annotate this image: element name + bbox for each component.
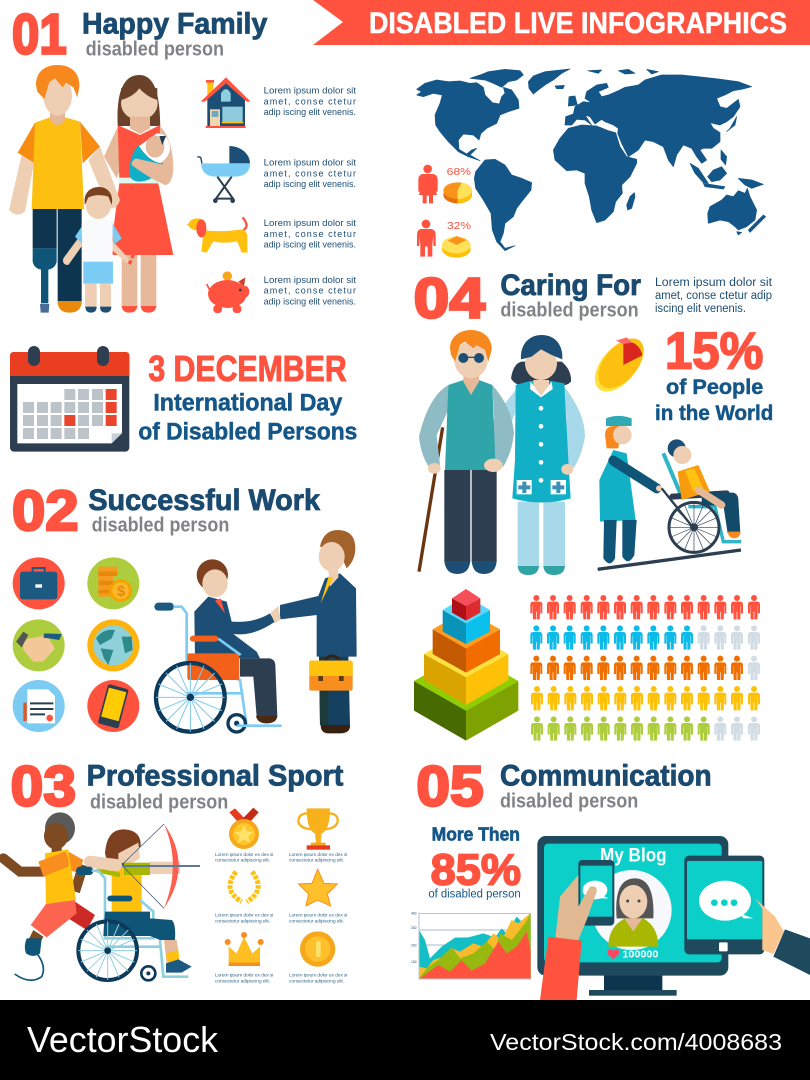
icon: baby pram xyxy=(197,146,250,203)
icon: laurel wreath xyxy=(230,872,258,902)
icon: handshake xyxy=(13,619,65,671)
text block: 3 december xyxy=(138,348,357,446)
area chart: 400 xyxy=(411,911,417,915)
panel: 3 december and 02 successful work xyxy=(10,346,357,733)
text block: sport captions: consectetur adipiscing elit. xyxy=(289,918,344,924)
text block: family list: amet, conse ctetur xyxy=(264,168,356,178)
text block: sport captions: consectetur adipiscing elit. xyxy=(215,918,270,924)
row: red 14 of 14 xyxy=(530,595,760,619)
stat: more then 85 percent xyxy=(428,824,521,901)
heading: 05 communication xyxy=(416,756,712,819)
text block: family list: adip iscing elit venenis. xyxy=(264,240,356,250)
text block: sport captions: consectetur adipiscing elit. xyxy=(215,978,270,984)
header ribbon xyxy=(313,0,810,45)
row: yellow 14 of 14 xyxy=(531,686,760,710)
figure: child with candy cane xyxy=(63,187,145,313)
text block: 3 december: International Day xyxy=(153,390,343,417)
3d stacked pyramid xyxy=(414,589,518,741)
stat: more then 85 percent: of disabled person xyxy=(428,887,521,901)
stat: more then 85 percent: More Then xyxy=(432,824,520,845)
stat: 68% women: 68% xyxy=(447,167,471,178)
text block: sport captions: Lorem ipsum dolor ex dex si xyxy=(289,973,347,979)
text block: family list: amet, conse ctetur xyxy=(264,96,356,106)
panel: world map and gender stats xyxy=(417,69,766,258)
stat: 32% men: 32% xyxy=(447,221,471,232)
heading: 02 successful work: Successful Work xyxy=(88,484,320,517)
figure: archer in wheelchair xyxy=(76,824,200,980)
panel: pyramid and people chart xyxy=(414,589,760,741)
heading: 02 successful work xyxy=(12,480,320,543)
heading: 01 happy family: Happy Family xyxy=(82,7,268,40)
icon: house xyxy=(201,77,251,128)
text block: caring intro: Lorem ipsum dolor sit xyxy=(655,277,773,289)
vectorstock image url: VectorStock.com/4008683 xyxy=(490,1029,782,1055)
icon: briefcase xyxy=(13,557,65,609)
text block: family list: adip iscing elit venenis. xyxy=(264,179,356,189)
pictogram chart xyxy=(530,595,760,741)
icon: gold coin xyxy=(300,931,335,967)
heading: 03 professional sport: Professional Sport xyxy=(87,760,343,793)
stat: 68% women xyxy=(418,165,472,203)
heading: 03 professional sport: 03 xyxy=(11,756,76,819)
stat: more then 85 percent: 85% xyxy=(431,846,521,894)
text block: sport captions xyxy=(215,852,347,984)
world map xyxy=(417,69,766,251)
heading: 04 caring for: Caring For xyxy=(500,269,641,302)
text block: family list: Lorem ipsum dolor sit xyxy=(264,218,357,228)
heading: 01 happy family xyxy=(12,3,268,66)
caring illustrations xyxy=(419,321,773,575)
text block: family list xyxy=(264,85,357,306)
heading: 04 caring for: disabled person xyxy=(500,300,639,322)
text block: 3 december: 3 DECEMBER xyxy=(148,348,347,389)
figure: man in wheelchair xyxy=(154,559,282,732)
figure: nurse xyxy=(482,335,585,575)
text block: 3 december: of Disabled Persons xyxy=(138,419,357,446)
row: blue 10 of 14 xyxy=(530,625,760,650)
text block: sport captions: consectetur adipiscing elit. xyxy=(289,858,344,864)
text block: sport captions: Lorem ipsum dolor ex dex si xyxy=(215,852,273,858)
heading: 03 professional sport xyxy=(11,756,343,819)
stat: 15 percent of people xyxy=(655,321,773,425)
stat: 15 percent of people: of People xyxy=(666,375,763,399)
text block: family list: Lorem ipsum dolor sit xyxy=(264,85,357,95)
icon: trophy xyxy=(298,808,338,850)
panel: 01 happy family xyxy=(9,3,357,313)
text block: family list: amet, conse ctetur xyxy=(264,229,356,239)
heading: 04 caring for xyxy=(414,268,641,331)
text block: sport captions: consectetur adipiscing elit. xyxy=(289,978,344,984)
text block: sport captions: Lorem ipsum dolor ex dex si xyxy=(215,973,273,979)
stat: 15 percent of people: in the World xyxy=(655,401,773,425)
footer watermark bar xyxy=(0,1000,810,1080)
heading: 05 communication: disabled person xyxy=(500,790,638,812)
figure: blind man with cane xyxy=(419,330,514,574)
figure: runner with blade prosthesis xyxy=(3,812,95,980)
icon: piggy bank xyxy=(207,271,249,313)
heading: 01 happy family: disabled person xyxy=(86,39,224,61)
text block: caring intro: amet, conse ctetur adip xyxy=(655,290,772,302)
icon: crown xyxy=(225,932,264,966)
heading: 02 successful work: disabled person xyxy=(92,515,229,537)
figure: father with prosthetic leg xyxy=(9,65,120,313)
row: orange 13 of 14 xyxy=(530,656,760,680)
tablet in hand xyxy=(684,856,810,975)
computer monitor with blog xyxy=(537,836,728,996)
icon: smartphone xyxy=(87,680,139,732)
icon: calendar xyxy=(10,346,129,452)
text block: caring intro xyxy=(655,277,773,315)
text block: family list: adip iscing elit venenis. xyxy=(264,296,356,306)
heading: 05 communication: Communication xyxy=(500,760,712,793)
icon: document xyxy=(13,680,65,732)
text block: caring intro: iscing elit venenis. xyxy=(655,303,746,315)
icon: coins: $ xyxy=(117,584,125,600)
smartphone in hand xyxy=(540,860,614,1000)
text block: sport captions: Lorem ipsum dolor ex dex si xyxy=(215,913,273,919)
stat: 32% men xyxy=(417,220,471,258)
heading: 04 caring for: 04 xyxy=(414,268,486,331)
area chart: 100 xyxy=(411,960,417,964)
row: green 11 of 14 xyxy=(531,716,760,741)
area chart: 300 xyxy=(411,926,417,930)
area chart: 200 xyxy=(411,944,417,948)
icon: star xyxy=(299,869,337,906)
text block: sport captions: consectetur adipiscing elit. xyxy=(215,858,270,864)
heading: 01 happy family: 01 xyxy=(12,3,67,66)
panel: 04 caring for xyxy=(414,268,773,575)
icon: 3d pie chart xyxy=(586,330,653,400)
stat: 15 percent of people: 15% xyxy=(665,321,763,379)
icon: coins xyxy=(87,557,139,609)
text block: family list: amet, conse ctetur xyxy=(264,286,356,296)
icon: dog xyxy=(187,217,247,253)
computer monitor with blog: 100000 xyxy=(622,949,659,960)
figure: mother with baby xyxy=(104,75,173,313)
heading: 03 professional sport: disabled person xyxy=(90,791,228,813)
heading: 05 communication: 05 xyxy=(416,756,484,819)
text block: sport captions: Lorem ipsum dolor ex dex si xyxy=(289,913,347,919)
icon: globe xyxy=(87,619,139,671)
area chart xyxy=(411,911,531,979)
figure: standing businessman with briefcase xyxy=(271,530,357,733)
icon: medal xyxy=(229,808,259,849)
text block: sport captions: Lorem ipsum dolor ex dex si xyxy=(289,852,347,858)
panel: 03 professional sport xyxy=(3,756,347,984)
panel: 05 communication xyxy=(411,756,810,1000)
text block: family list: adip iscing elit venenis. xyxy=(264,107,356,117)
text block: family list: Lorem ipsum dolor sit xyxy=(264,275,357,285)
vectorstock logo text: VectorStock xyxy=(27,1019,219,1060)
computer monitor with blog: My Blog xyxy=(600,846,667,867)
text block: family list: Lorem ipsum dolor sit xyxy=(264,157,357,167)
heading: 02 successful work: 02 xyxy=(12,480,79,543)
figure: nurse pushing wheelchair up ramp xyxy=(598,416,741,569)
